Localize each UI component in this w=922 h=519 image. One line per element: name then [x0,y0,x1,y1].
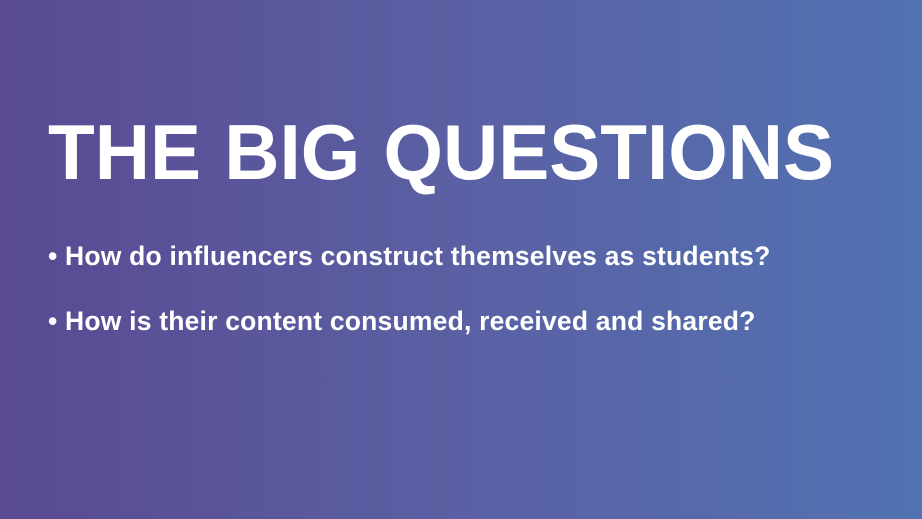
bullet question 2: • How is their content consumed, received and shared? [48,306,756,336]
title: THE BIG QUESTIONS [48,110,834,196]
bullet question 1: • How do influencers construct themselves as students? [48,241,770,271]
